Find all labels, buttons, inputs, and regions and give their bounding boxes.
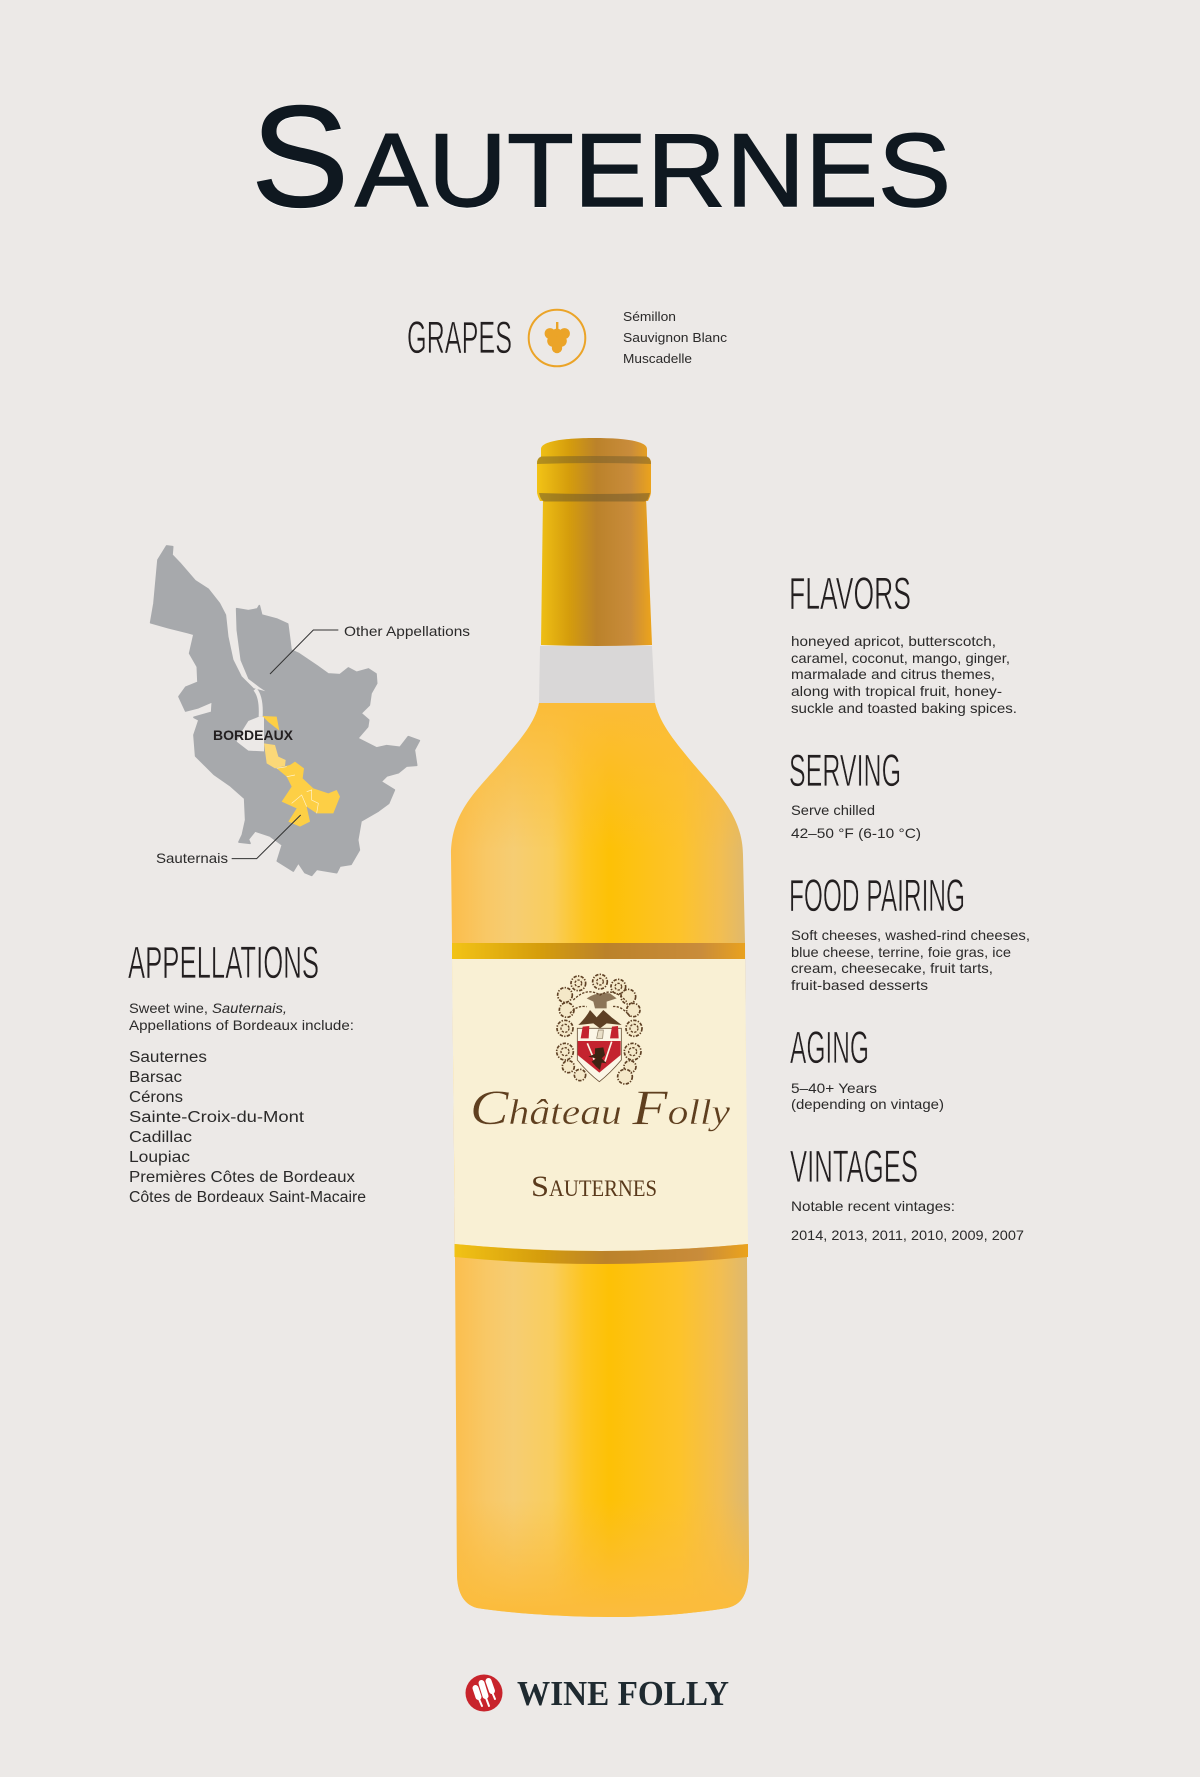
icon: grape cluster xyxy=(529,310,585,366)
intro text xyxy=(129,1000,354,1033)
map of Bordeaux xyxy=(151,546,470,875)
glass neck xyxy=(539,646,655,703)
flavors text: caramel, coconut, mango, ginger, xyxy=(791,650,1010,666)
serving text xyxy=(791,802,921,841)
callout: other appellations xyxy=(270,623,470,674)
wine label xyxy=(452,959,748,1251)
aging text: 5–40+ Years xyxy=(791,1080,877,1096)
food pairing text: cream, cheesecake, fruit tarts, xyxy=(791,960,993,976)
panel: serving xyxy=(789,745,921,841)
aging text xyxy=(791,1080,944,1112)
logo wordmark: WINE FOLLY xyxy=(517,1674,729,1713)
intro text: Appellations of Bordeaux include: xyxy=(129,1017,354,1033)
gold band: lower xyxy=(454,1244,748,1264)
vintages text: Notable recent vintages: xyxy=(791,1198,955,1214)
heading: aging: AGING xyxy=(790,1022,869,1073)
flavors text: suckle and toasted baking spices. xyxy=(791,700,1017,716)
panel: aging xyxy=(790,1022,944,1112)
panel: food pairing xyxy=(789,870,1030,993)
panel: appellations xyxy=(128,937,366,1206)
flavors text: marmalade and citrus themes, xyxy=(791,666,995,682)
intro text: Sweet wine, xyxy=(129,1000,208,1016)
food pairing text: Soft cheeses, washed-rind cheeses, xyxy=(791,927,1030,943)
bottle glass body xyxy=(451,703,749,1617)
appellation list: Loupiac xyxy=(129,1149,190,1166)
title: S xyxy=(251,78,349,238)
grape varieties xyxy=(623,309,728,366)
heading: grapes: GRAPES xyxy=(407,312,512,363)
panel: flavors xyxy=(789,568,1017,716)
appellation list: Premières Côtes de Bordeaux xyxy=(129,1169,355,1186)
panel: vintages xyxy=(790,1141,1024,1243)
title: AUTERNES xyxy=(355,113,951,229)
appellation list: Cérons xyxy=(129,1089,183,1106)
heading: appellations: APPELLATIONS xyxy=(128,937,319,988)
title: AUTERNES xyxy=(355,114,951,230)
callout: sauternais: Sauternais xyxy=(156,850,228,866)
grapes section xyxy=(407,309,728,366)
title xyxy=(251,76,951,238)
serving text: 42–50 °F (6-10 °C) xyxy=(791,825,921,841)
icon: wine folly badge xyxy=(466,1674,502,1712)
food pairing text: blue cheese, terrine, foie gras, ice xyxy=(791,944,1011,960)
map shape xyxy=(151,546,419,875)
label: chateau folly: Château Folly xyxy=(470,1079,730,1135)
food pairing text: fruit-based desserts xyxy=(791,977,928,993)
food pairing text xyxy=(791,927,1030,993)
flavors text: honeyed apricot, butterscotch, xyxy=(791,633,996,649)
grape varieties: Sauvignon Blanc xyxy=(623,330,728,345)
appellation list: Cadillac xyxy=(129,1129,192,1146)
grape varieties: Sémillon xyxy=(623,309,676,324)
appellation list: Sauternes xyxy=(129,1049,207,1066)
foil capsule xyxy=(537,438,652,646)
intro text: Sauternais, xyxy=(212,1000,287,1016)
appellation list: Côtes de Bordeaux Saint-Macaire xyxy=(129,1189,366,1206)
wine bottle xyxy=(451,438,749,1617)
crest xyxy=(557,974,642,1084)
grape varieties: Muscadelle xyxy=(623,351,692,366)
title: S xyxy=(251,76,349,237)
vintages text: 2014, 2013, 2011, 2010, 2009, 2007 xyxy=(791,1227,1024,1243)
aging text: (depending on vintage) xyxy=(791,1096,944,1112)
callout: other appellations: Other Appellations xyxy=(344,623,470,639)
heading: flavors: FLAVORS xyxy=(789,568,911,619)
base shading xyxy=(456,1500,749,1617)
appellation list xyxy=(129,1049,366,1206)
flavors text: along with tropical fruit, honey- xyxy=(791,683,1002,699)
appellation list: Barsac xyxy=(129,1069,182,1086)
appellation list: Sainte-Croix-du-Mont xyxy=(129,1109,305,1126)
heading: vintages: VINTAGES xyxy=(790,1141,918,1192)
label: sauternes: AUTERNES xyxy=(549,1176,657,1201)
gold band: upper xyxy=(452,943,745,959)
heading: food pairing: FOOD PAIRING xyxy=(789,870,965,921)
label: sauternes: S xyxy=(531,1170,549,1203)
logo: wine folly xyxy=(466,1674,729,1713)
callout: sauternais xyxy=(156,815,301,866)
heading: serving: SERVING xyxy=(789,745,901,796)
label: sauternes xyxy=(531,1170,657,1203)
flavors text xyxy=(791,633,1017,716)
shoulder shading xyxy=(451,703,743,855)
vintages text xyxy=(791,1198,1024,1243)
serving text: Serve chilled xyxy=(791,802,875,818)
label: Bordeaux: BORDEAUX xyxy=(213,727,294,743)
